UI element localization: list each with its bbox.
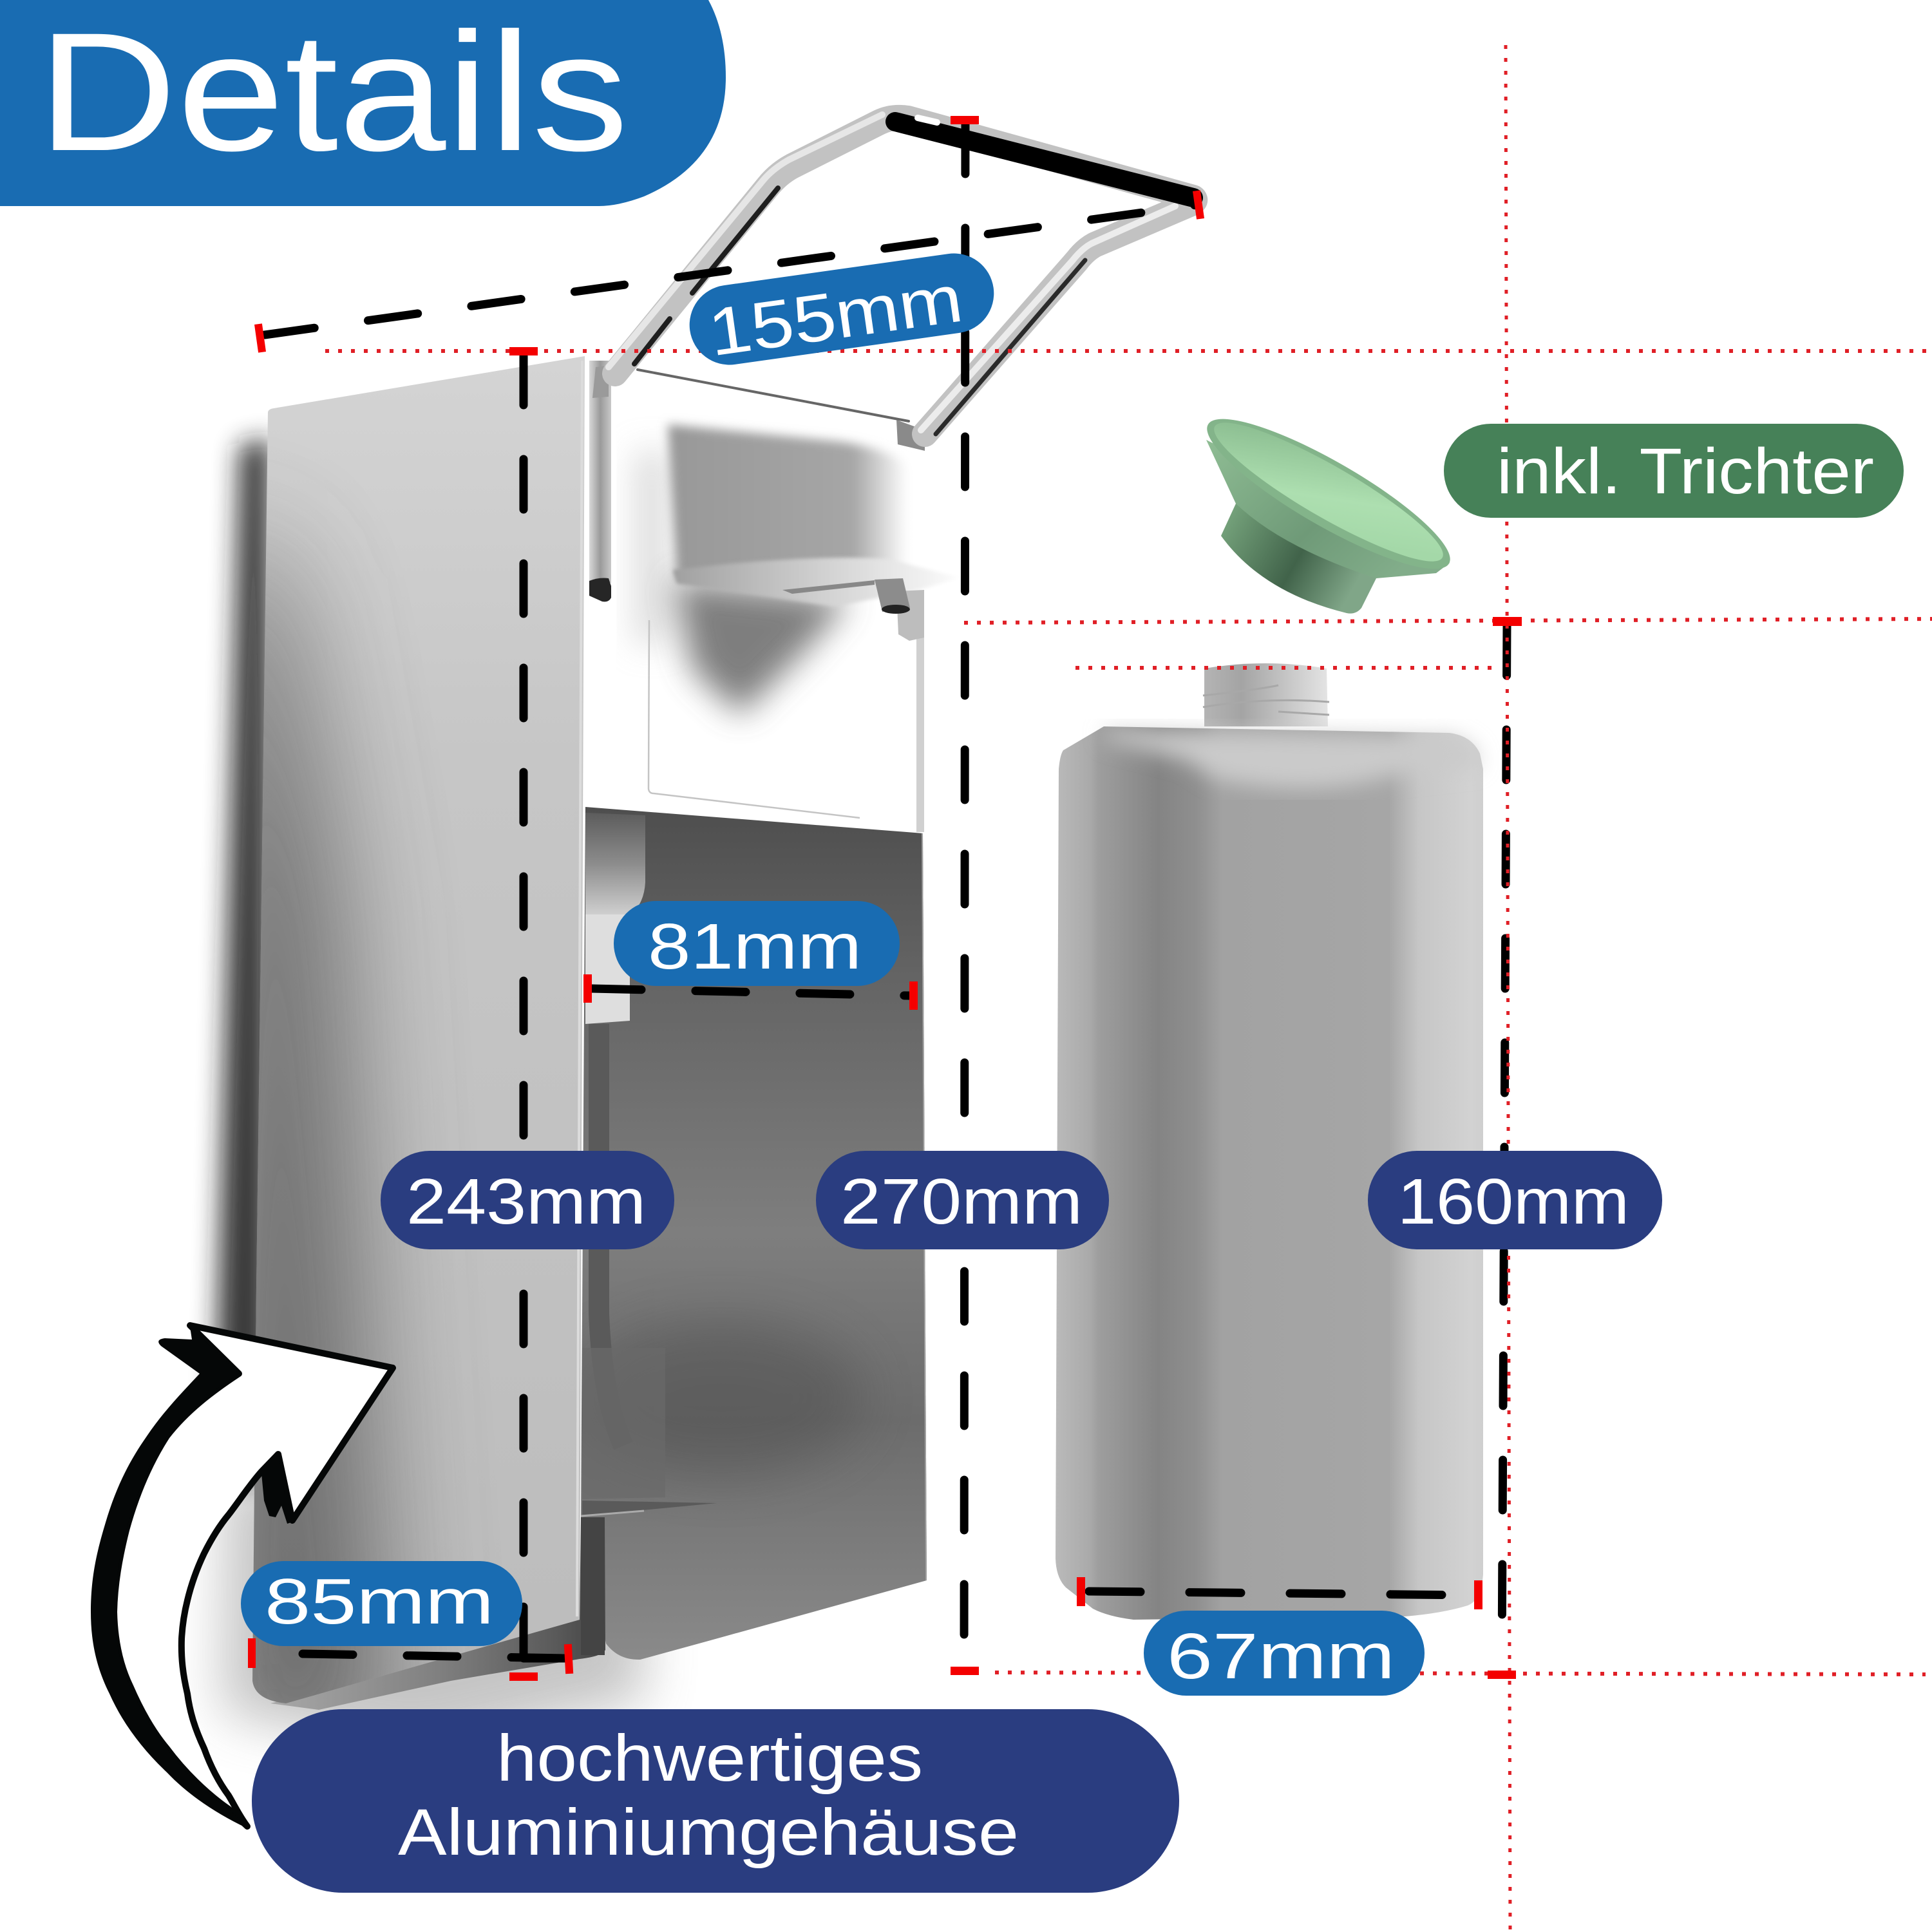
callout: hochwertiges Aluminiumgehäuse: Aluminiumgehäuse	[398, 1795, 1019, 1869]
label: 155mm: 155mm	[704, 261, 967, 370]
dispenser housing	[213, 356, 960, 1771]
spout	[875, 578, 910, 614]
bottle shoulder	[1105, 730, 1479, 788]
label: 81mm: 81mm	[648, 911, 862, 983]
inner tube and fitting	[581, 813, 717, 1655]
funnel	[1192, 397, 1465, 614]
label: 85mm: 85mm	[265, 1566, 494, 1638]
label: 67mm	[1144, 1611, 1425, 1696]
curved arrow	[91, 1325, 393, 1828]
bottle	[1056, 663, 1483, 1620]
spout bracket	[896, 590, 924, 641]
arrow thick edge	[91, 1327, 247, 1828]
light panel frame	[649, 620, 860, 818]
dashed dimension lines	[265, 124, 1507, 1668]
label: 160mm: 160mm	[1397, 1166, 1629, 1238]
red dimension ticks	[248, 116, 1522, 1681]
callout: hochwertiges Aluminiumgehäuse	[252, 1709, 1179, 1893]
arrow white body	[114, 1325, 393, 1826]
callout: hochwertiges Aluminiumgehäuse: hochwertiges	[497, 1721, 923, 1795]
label: inkl. Trichter: inkl. Trichter	[1497, 435, 1874, 507]
upper white panel	[583, 357, 923, 832]
pump head	[634, 424, 960, 715]
label: 243mm	[381, 1151, 674, 1249]
handle lever	[592, 115, 1195, 451]
vertical red guide	[1506, 45, 1510, 1932]
label: 270mm	[816, 1151, 1109, 1249]
label: 85mm	[241, 1561, 522, 1646]
label: 243mm: 243mm	[406, 1166, 646, 1238]
label: inkl. Trichter	[1444, 424, 1904, 518]
dotted red guide lines	[325, 351, 1932, 1674]
label: 155mm	[685, 248, 999, 373]
bottle body	[1056, 726, 1483, 1620]
back plate	[252, 356, 585, 1703]
label: 160mm	[1368, 1151, 1662, 1249]
label: 81mm	[614, 901, 900, 986]
label: 67mm: 67mm	[1167, 1620, 1395, 1692]
bottle neck	[1203, 663, 1329, 726]
vertical side strip	[589, 361, 611, 601]
lower compartment	[580, 807, 927, 1660]
header: Details: Details	[37, 0, 629, 186]
right panel strip	[916, 638, 924, 832]
label: 270mm: 270mm	[840, 1166, 1083, 1238]
header: Details	[0, 0, 726, 206]
arrow notch zigzag	[261, 1452, 295, 1524]
bottom housing strip	[270, 1517, 605, 1710]
